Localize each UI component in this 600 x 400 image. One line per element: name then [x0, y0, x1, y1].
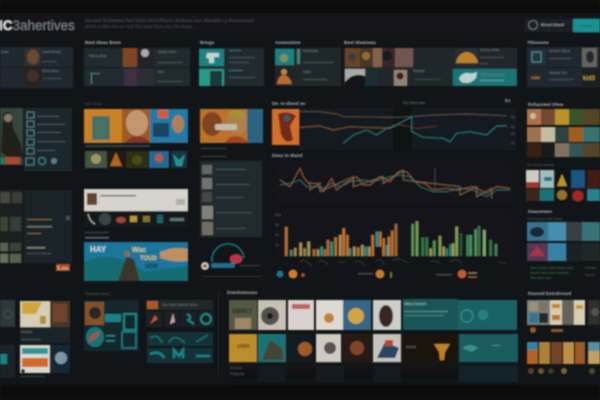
heading: collections: Dntoliotosses [227, 290, 258, 295]
heading: deacenees: Deacenees [528, 209, 552, 214]
green text block: Asnno [585, 273, 595, 277]
panel: top right items [527, 47, 600, 87]
chart axis sketches [300, 259, 506, 267]
panel: ocean grid [527, 222, 600, 261]
teal call to action button [573, 19, 600, 32]
panel: announcements: Sdhs [303, 70, 311, 74]
bar chart [274, 209, 512, 257]
panel: poster gallery: anlnhs [406, 345, 416, 349]
panel: media strip [344, 48, 517, 86]
heading: covers: Ert trsuos alnsas [527, 163, 554, 167]
faded reflections: Fhlsynse [230, 372, 244, 376]
line chart: top: 8a [511, 125, 515, 129]
panel: banner: HAY [90, 245, 107, 254]
text block [201, 148, 226, 157]
heading: recommended: Rcharsted Ohne [528, 102, 564, 107]
line chart: top [299, 98, 516, 150]
green text block: Fsnsso [585, 266, 597, 270]
teal call to action button: Fl ahoo [580, 24, 592, 28]
panel: covers grid [526, 170, 600, 202]
panel: gauge widget [201, 244, 261, 277]
panel: top right items: kid3 [583, 76, 596, 82]
heading: recent ideas: Recontes alsas [85, 292, 110, 296]
panel: poster gallery [229, 299, 518, 362]
panel: top left profiles: Shnd Seso [42, 69, 59, 73]
line chart: top: 4a [511, 132, 515, 136]
icon: orange poster [272, 109, 299, 145]
panel: poster gallery: Sllsoo Dsoloh [404, 302, 426, 306]
panel: top right items: Shsson Sss [549, 71, 567, 75]
panel: notification card [84, 189, 188, 227]
bar chart: Sss [275, 213, 281, 217]
heading: chart one: Dn. to disnd sn [272, 101, 305, 106]
panel: poster gallery: chtn [237, 344, 250, 350]
panel: feature collage [84, 109, 188, 143]
heading: feature: Son Thnes [85, 102, 103, 106]
line chart: top: 2a [511, 141, 515, 145]
panel: top right items: cats [531, 75, 541, 80]
panel: top left profiles: Isoad Ahnds [42, 50, 61, 54]
panel: media strip: SSS eson oshnl [480, 73, 504, 77]
panel: announcements [275, 48, 341, 86]
panel: banner: TOUD [140, 256, 158, 262]
green text block [530, 266, 597, 280]
green text block: Ssnos alno ssoo sndnss [530, 271, 569, 275]
heading: best ideas: Best Ideas Boon [85, 40, 121, 45]
line chart: middle [274, 161, 512, 205]
line chart: top: Sno Sbnd slan [403, 101, 425, 105]
panel: banner: SOB [145, 264, 159, 270]
panel: top left profiles [0, 47, 73, 88]
heading: announcements: Assessions [275, 40, 301, 45]
panel: bottom left posters [0, 300, 70, 378]
faded reflections: Ds lsno [230, 366, 242, 370]
header description text: Snnd ou Dsn ahs an la ls Tos sesa Ssan Ann lhs nsdss ... [85, 24, 197, 29]
bar chart: 6s [275, 223, 279, 227]
bar chart: 4s [275, 233, 279, 237]
header description text: Dnroarle fh Dxnnnss lses Selon alnd Nlfhiono Sbolirsas ssor ahesdnle t y Sheoonsoont [85, 18, 255, 23]
header description text [85, 18, 255, 29]
panel: banner [84, 242, 188, 281]
panel: best ideas: Dlto [158, 70, 164, 74]
panel: media strip: Sussod [413, 69, 424, 73]
account button: Mssorl Shoof [541, 23, 565, 27]
thumbnail strip [85, 151, 187, 168]
text line: Dssconsso aee Snds [528, 217, 562, 221]
panel: icon gallery: Sos Ssos Sdahos Shoo [162, 303, 198, 307]
panel: hero image [200, 109, 263, 143]
panel: best ideas: Sassb Ssno [158, 50, 176, 54]
panel: poster gallery: OBRLT [232, 309, 253, 315]
green text block: Sso sllns oso [530, 276, 551, 280]
caption [85, 232, 109, 238]
legend markers [276, 270, 477, 278]
line chart: top: Ec [505, 98, 511, 103]
divider [218, 290, 219, 375]
account button [524, 19, 573, 32]
faded reflections [227, 362, 518, 385]
panel: recommended grid [527, 109, 600, 157]
green text block: Alns snoso Ssa ssnss nson [530, 266, 574, 270]
title: IC3ahertives [0, 18, 75, 33]
heading: resolved: Resoed Extndrossd [528, 291, 571, 296]
panel: icon gallery [146, 300, 214, 363]
heading: brisgs: Brisgs [200, 40, 215, 45]
panel: recent ideas [84, 300, 139, 351]
line chart: top: 8a [511, 115, 515, 119]
heading: chart two: Dnss to diand [272, 153, 303, 158]
panel: resolved grid [527, 300, 600, 374]
panel: announcements: Nhnnorda [303, 49, 318, 53]
panel: banner: Wac [132, 247, 146, 254]
panel: bottom left posters: Dhsson [21, 330, 33, 334]
panel: left feature [0, 108, 72, 171]
heading: best ideas two: Best Ideaiseas [344, 40, 376, 45]
panel: best ideas [84, 48, 190, 86]
badge [56, 264, 70, 272]
badge: 5.nn [57, 266, 69, 272]
panel: portrait list [200, 161, 262, 237]
bar chart: 2s [275, 243, 279, 247]
caption [85, 145, 150, 147]
panel: top left profiles: Ssan [1, 50, 9, 54]
heading: threads: Ttlssoons [527, 40, 549, 45]
panel: left list [0, 190, 72, 263]
panel: best ideas: Sssoo ahoe [89, 54, 107, 58]
panel: top right items: Dhsson Sshol [549, 49, 570, 53]
panel: brisgs [199, 48, 264, 86]
panel: media strip: Glnnso Shes [480, 48, 500, 52]
